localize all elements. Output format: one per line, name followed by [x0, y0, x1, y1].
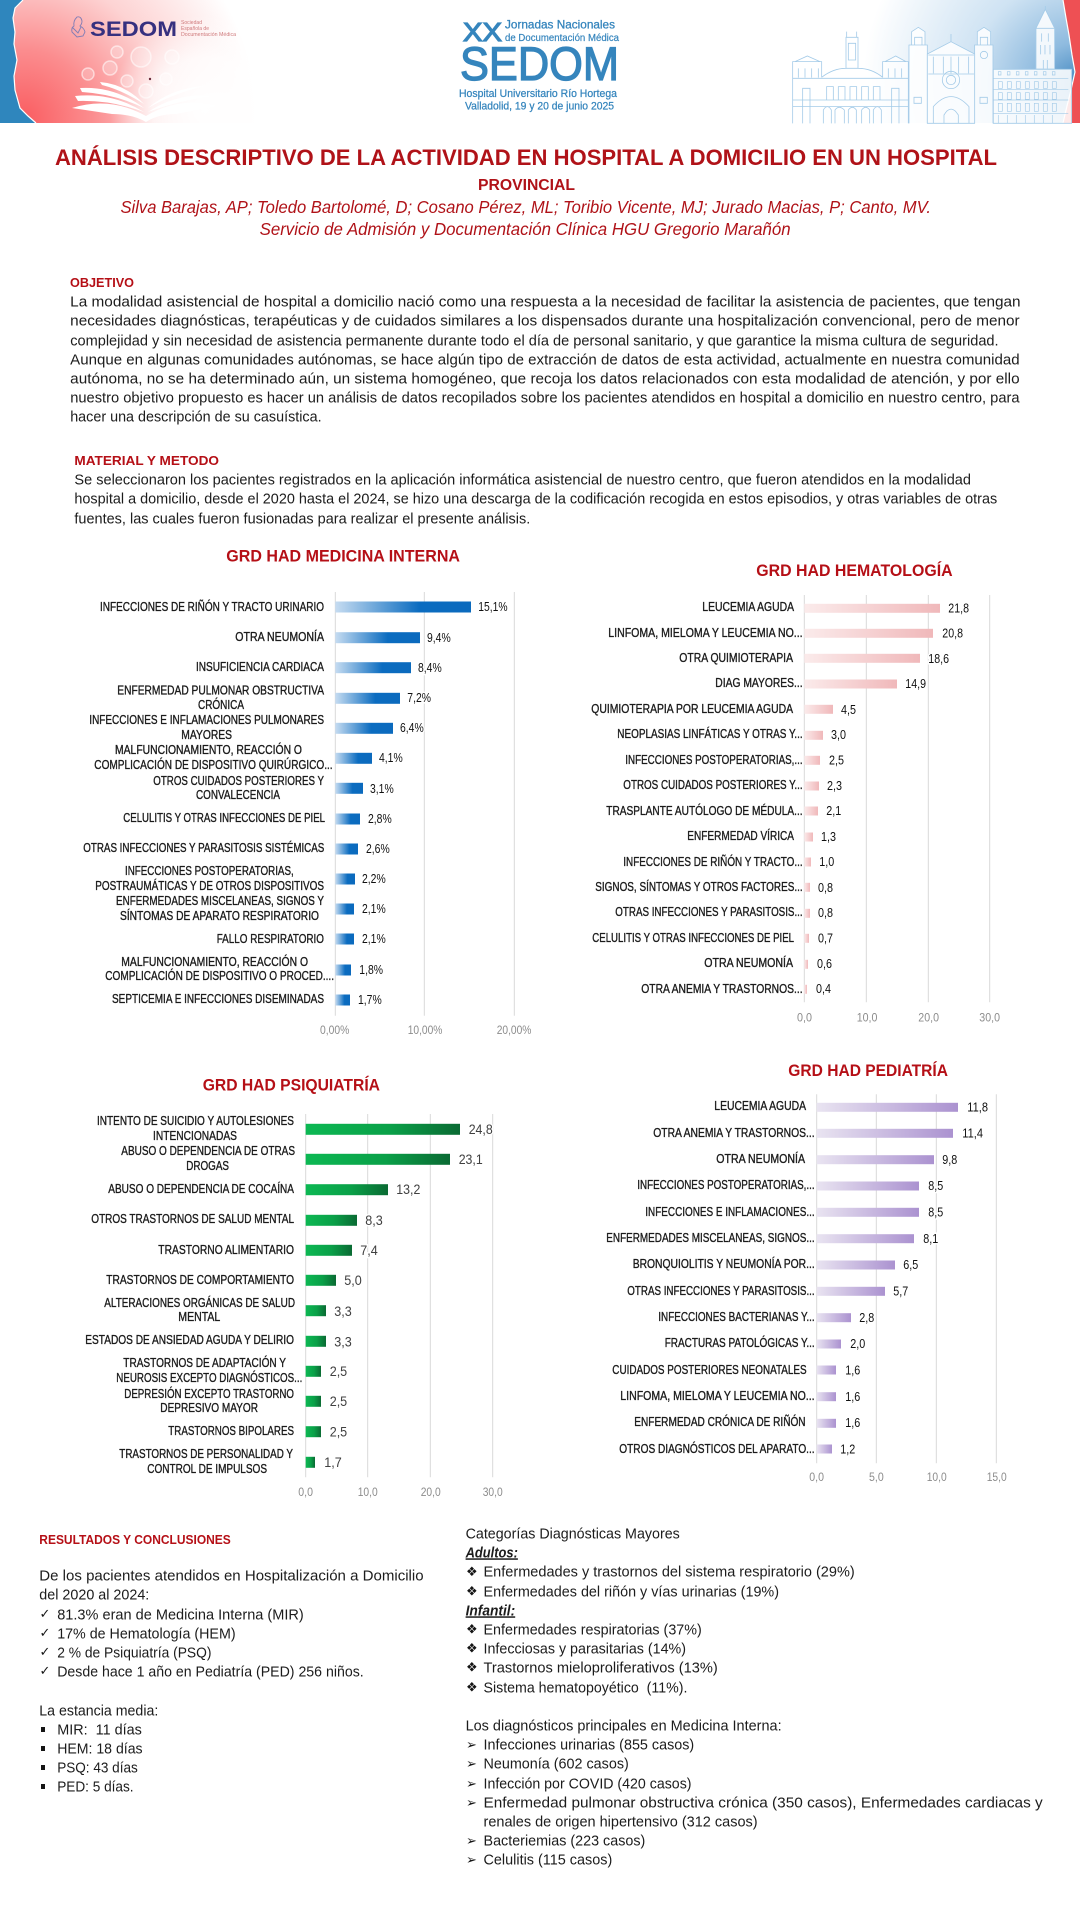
category labels: OTROS DIAGNÓSTICOS DEL APARATO...	[619, 1441, 815, 1456]
value labels: 23,1	[459, 1151, 483, 1167]
value labels: 4,1%	[379, 751, 403, 765]
intro text: De los pacientes atendidos en Hospitalización a Domicilio	[39, 1568, 424, 1585]
value labels	[840, 1100, 988, 1456]
category labels: OTRA NEUMONÍA	[704, 955, 794, 970]
value labels	[324, 1121, 493, 1470]
category labels: CUIDADOS POSTERIORES NEONATALES	[612, 1363, 807, 1377]
value labels: 8,5	[928, 1179, 943, 1193]
objective paragraph: La modalidad asistencial de hospital a domicilio nació como una respuesta a la necesidad de facilitar la asistencia de pacientes, que tengan	[70, 294, 1021, 311]
category labels: DEPRESIVO MAYOR	[160, 1401, 258, 1415]
icon: open book with floating bubbles	[72, 46, 218, 122]
SEDOM society logo: Documentación Médica	[181, 32, 236, 38]
diagnósticos principales list: ➢	[466, 1834, 477, 1849]
value labels	[816, 601, 969, 996]
section: objetivo	[70, 275, 1021, 426]
objective paragraph: necesidades diagnósticas, terapéuticas y de cuidados similares a los dispensados durante una hospitalización convencional, pero de menor	[70, 313, 1020, 330]
categorías diagnósticas mayores list: ❖	[466, 1584, 478, 1600]
intro text	[39, 1568, 424, 1604]
method paragraph: hospital a domicilio, desde el 2020 hasta el 2024, se hizo una descarga de la codificación recogida en estos episodios, y otras variables de otras	[74, 491, 997, 508]
congress logo: XX Jornadas Nacionales SEDOM: Hospital Universitario Río Hortega	[459, 88, 618, 100]
value labels: 1,6	[845, 1390, 860, 1404]
checklist of services	[40, 1606, 364, 1680]
value labels: 21,8	[948, 601, 969, 615]
value labels: 11,8	[967, 1100, 988, 1114]
category labels: OTRA ANEMIA Y TRASTORNOS...	[641, 982, 803, 996]
diagnósticos principales list: Infección por COVID (420 casos)	[484, 1775, 692, 1792]
checklist of services: Desde hace 1 año en Pediatría (PED) 256 niños.	[57, 1663, 364, 1680]
SEDOM society logo: SEDOM	[90, 18, 177, 41]
category labels: OTRAS INFECCIONES Y PARASITOSIS...	[627, 1284, 815, 1298]
method paragraph: Se seleccionaron los pacientes registrados en la aplicación informática asistencial de nuestro centro, que fueron atendidos en la modalidad	[74, 472, 971, 489]
bar chart rows	[306, 1124, 460, 1468]
categorías diagnósticas mayores list: Enfermedades respiratorias (37%)	[484, 1621, 702, 1638]
congress logo: XX Jornadas Nacionales SEDOM: de Documentación Médica	[505, 32, 619, 44]
category labels: SIGNOS, SÍNTOMAS Y OTROS FACTORES...	[595, 879, 803, 894]
axis labels: 20,0	[421, 1485, 441, 1499]
diagnósticos principales list: Celulitis (115 casos)	[484, 1851, 612, 1868]
category labels: LEUCEMIA AGUDA	[714, 1099, 807, 1113]
category labels: INFECCIONES POSTOPERATORIAS,...	[637, 1178, 815, 1192]
category labels: LINFOMA, MIELOMA Y LEUCEMIA NO...	[608, 626, 803, 640]
value labels: 0,4	[816, 982, 831, 996]
category labels	[606, 1099, 815, 1456]
congress logo: XX Jornadas Nacionales SEDOM	[459, 17, 619, 112]
category labels: ABUSO O DEPENDENCIA DE COCAÍNA	[108, 1181, 295, 1196]
category labels: ABUSO O DEPENDENCIA DE OTRAS	[121, 1144, 295, 1158]
value labels: 5,7	[893, 1284, 908, 1298]
category labels: ENFERMEDADES MISCELANEAS, SIGNOS Y	[116, 894, 325, 908]
value labels: 2,6%	[366, 842, 390, 856]
chart heading: GRD HAD MEDICINA INTERNA	[226, 548, 460, 566]
axis labels: 0,0	[298, 1485, 313, 1499]
category labels: OTRAS INFECCIONES Y PARASITOSIS...	[615, 905, 803, 919]
category labels: NEUROSIS EXCEPTO DIAGNÓSTICOS...	[116, 1370, 302, 1385]
bar chart rows	[804, 604, 940, 994]
axis labels: 0,0	[797, 1010, 812, 1024]
value labels: 2,2%	[362, 872, 386, 886]
category labels: TRASTORNO ALIMENTARIO	[158, 1243, 294, 1257]
value labels: 2,5	[330, 1424, 347, 1440]
category labels: ENFERMEDAD PULMONAR OBSTRUCTIVA	[117, 683, 325, 697]
category labels: INFECCIONES DE RIÑÓN Y TRACTO...	[623, 854, 803, 869]
diagnósticos principales list: ➢	[466, 1777, 477, 1792]
categorías diagnósticas mayores list: ❖	[466, 1680, 478, 1696]
category labels: INFECCIONES BACTERIANAS Y...	[658, 1310, 815, 1324]
categorías diagnósticas mayores list	[465, 1526, 855, 1696]
heading: material y metodo: MATERIAL Y METODO	[74, 453, 219, 468]
category labels: BRONQUIOLITIS Y NEUMONÍA POR...	[633, 1256, 815, 1271]
average stay list: PSQ: 43 días	[57, 1759, 138, 1776]
axis labels	[809, 1470, 1007, 1484]
SEDOM society logo: Sociedad	[181, 20, 202, 26]
average stay list: PED: 5 días.	[57, 1778, 134, 1795]
section: material y metodo	[74, 453, 997, 528]
title second line: PROVINCIAL	[478, 177, 575, 194]
category labels: SEPTICEMIA E INFECCIONES DISEMINADAS	[112, 992, 324, 1006]
average stay list	[39, 1703, 158, 1795]
value labels: 0,8	[818, 906, 833, 920]
objective paragraph: nuestro objetivo propuesto es hacer un análisis de datos recopilados sobre los pacientes atendidos en hospital a domicilio en nuestro centro, para	[70, 390, 1020, 407]
value labels: 6,5	[903, 1258, 918, 1272]
value labels: 1,8%	[359, 963, 383, 977]
axis labels: 30,0	[483, 1485, 503, 1499]
category labels: MENTAL	[178, 1310, 220, 1324]
checklist of services: 81.3% eran de Medicina Interna (MIR)	[57, 1606, 304, 1623]
panel: chart GRD HAD Hematología	[591, 561, 1000, 1024]
category labels: OTRA QUIMIOTERAPIA	[679, 651, 794, 665]
value labels: 6,4%	[400, 721, 424, 735]
axis labels: 20,00%	[497, 1023, 532, 1037]
axis labels: 10,00%	[408, 1023, 443, 1037]
category labels: OTRAS INFECCIONES Y PARASITOSIS SISTÉMICAS	[83, 840, 324, 855]
axis labels: 5,0	[869, 1470, 884, 1484]
category labels: INTENCIONADAS	[153, 1129, 237, 1143]
value labels: 0,6	[817, 957, 832, 971]
axis labels: 10,0	[857, 1010, 878, 1024]
axis labels	[797, 1010, 1000, 1024]
category labels: MALFUNCIONAMIENTO, REACCIÓN O	[115, 742, 302, 757]
checklist of services: ✓	[40, 1645, 50, 1660]
congress logo: XX Jornadas Nacionales SEDOM: Jornadas Nacionales	[505, 18, 615, 32]
logo icon: figure outline	[72, 17, 85, 37]
poster title block	[55, 145, 997, 239]
congress logo: XX Jornadas Nacionales SEDOM: Valladolid, 19 y 20 de junio 2025	[465, 100, 614, 112]
category labels: COMPLICACIÓN DE DISPOSITIVO QUIRÚRGICO...	[94, 757, 333, 772]
category labels: OTRA NEUMONÍA	[716, 1151, 806, 1166]
axis labels: 30,0	[979, 1010, 1000, 1024]
panel: categorías diagnósticas y diagnósticos principales	[465, 1526, 1043, 1868]
categorías diagnósticas mayores list: Infantil:	[466, 1602, 515, 1619]
category labels: NEOPLASIAS LINFÁTICAS Y OTRAS Y...	[617, 726, 803, 741]
category labels: LEUCEMIA AGUDA	[702, 600, 795, 614]
value labels: 2,1	[826, 804, 841, 818]
average stay list: La estancia media:	[39, 1703, 158, 1720]
value labels: 2,3	[827, 779, 842, 793]
value labels: 1,6	[845, 1363, 860, 1377]
category labels: OTROS CUIDADOS POSTERIORES Y...	[623, 778, 803, 792]
category labels: INFECCIONES E INFLAMACIONES...	[645, 1205, 815, 1219]
category labels: CELULITIS Y OTRAS INFECCIONES DE PIEL	[123, 811, 325, 825]
category labels: CELULITIS Y OTRAS INFECCIONES DE PIEL	[592, 931, 794, 945]
SEDOM society logo: Española de	[181, 26, 209, 32]
category labels: OTROS CUIDADOS POSTERIORES Y	[153, 774, 325, 788]
category labels: COMPLICACIÓN DE DISPOSITIVO O PROCED....	[105, 968, 334, 983]
intro text: del 2020 al 2024:	[39, 1587, 149, 1604]
value labels: 8,3	[365, 1212, 383, 1228]
value labels: 3,3	[334, 1303, 352, 1319]
category labels: CONVALECENCIA	[196, 788, 281, 802]
category labels: TRASTORNOS DE ADAPTACIÓN Y	[123, 1355, 287, 1370]
category labels: FALLO RESPIRATORIO	[217, 932, 324, 946]
value labels: 3,1%	[370, 782, 394, 796]
value labels: 18,6	[928, 652, 949, 666]
value labels: 0,7	[818, 932, 833, 946]
axis labels: 10,0	[358, 1485, 378, 1499]
bar chart rows	[335, 602, 471, 1006]
diagnósticos principales list: ➢	[466, 1853, 477, 1868]
diagnósticos principales list: Los diagnósticos principales en Medicina Interna:	[466, 1718, 782, 1735]
panel: chart GRD HAD Psiquiatría	[85, 1076, 503, 1499]
categorías diagnósticas mayores list: Sistema hematopoyético (11%).	[484, 1679, 687, 1696]
axis labels: 10,0	[927, 1470, 947, 1484]
category labels: OTRA ANEMIA Y TRASTORNOS...	[653, 1126, 815, 1140]
average stay list: MIR: 11 días	[57, 1721, 142, 1738]
value labels: 3,0	[831, 728, 846, 742]
chart heading: GRD HAD HEMATOLOGÍA	[756, 561, 953, 580]
category labels: TRASPLANTE AUTÓLOGO DE MÉDULA...	[606, 803, 803, 818]
category labels: TRASTORNOS DE COMPORTAMIENTO	[106, 1273, 294, 1287]
SEDOM society logo	[72, 17, 236, 41]
axis labels: 15,0	[987, 1470, 1007, 1484]
categorías diagnósticas mayores list: Enfermedades y trastornos del sistema respiratorio (29%)	[484, 1564, 855, 1581]
value labels: 2,5	[330, 1393, 347, 1409]
category labels: INTENTO DE SUICIDIO Y AUTOLESIONES	[97, 1114, 294, 1128]
category labels: TRASTORNOS BIPOLARES	[168, 1424, 294, 1438]
category labels: ALTERACIONES ORGÁNICAS DE SALUD	[104, 1295, 295, 1310]
diagnósticos principales list: ➢	[466, 1738, 477, 1753]
value labels: 2,5	[829, 753, 844, 767]
heading: resultados y conclusiones: RESULTADOS Y CONCLUSIONES	[39, 1533, 231, 1547]
categorías diagnósticas mayores list: Categorías Diagnósticas Mayores	[466, 1526, 680, 1543]
categorías diagnósticas mayores list: Trastornos mieloproliferativos (13%)	[484, 1659, 718, 1676]
category labels: OTRA NEUMONÍA	[235, 629, 325, 644]
value labels: 0,8	[818, 881, 833, 895]
value labels: 1,3	[821, 830, 836, 844]
header banner	[0, 0, 1080, 123]
value labels: 2,1%	[362, 902, 386, 916]
categorías diagnósticas mayores list: Enfermedades del riñón y vías urinarias (19%)	[484, 1583, 779, 1600]
affiliation: Servicio de Admisión y Documentación Clínica HGU Gregorio Marañón	[260, 219, 791, 239]
value labels: 1,6	[845, 1416, 860, 1430]
category labels: QUIMIOTERAPIA POR LEUCEMIA AGUDA	[591, 702, 794, 716]
value labels: 13,2	[396, 1181, 420, 1197]
average stay list: HEM: 18 días	[57, 1740, 143, 1757]
checklist of services: ✓	[40, 1664, 50, 1679]
left banner art: red gradient and torn blue strip	[0, 0, 300, 123]
panel: resultados y conclusiones	[39, 1533, 424, 1795]
category labels: SÍNTOMAS DE APARATO RESPIRATORIO	[120, 908, 319, 923]
objective paragraph: autónoma, no se ha determinado aún, un sistema homogéneo, que recoja los datos relacionados con esta modalidad de atención, y por ello	[70, 371, 1020, 388]
category labels	[85, 1114, 302, 1476]
categorías diagnósticas mayores list: ❖	[466, 1642, 478, 1656]
value labels: 2,0	[850, 1337, 865, 1351]
category labels: ESTADOS DE ANSIEDAD AGUDA Y DELIRIO	[85, 1333, 294, 1347]
categorías diagnósticas mayores list: Adultos:	[465, 1544, 518, 1561]
congress logo: XX Jornadas Nacionales SEDOM: SEDOM	[460, 37, 619, 90]
method paragraph: fuentes, las cuales fueron fusionadas para realizar el presente análisis.	[74, 511, 530, 528]
authors: Silva Barajas, AP; Toledo Bartolomé, D; Cosano Pérez, ML; Toribio Vicente, MJ; Jurado Macias, P; Canto, MV.	[120, 197, 931, 217]
category labels: CONTROL DE IMPULSOS	[147, 1462, 267, 1476]
value labels: 20,8	[942, 626, 963, 640]
value labels: 24,8	[469, 1121, 493, 1137]
right banner art: blue gradient and torn red strip	[860, 0, 1080, 123]
category labels: INFECCIONES E INFLAMACIONES PULMONARES	[89, 713, 324, 727]
diagnósticos principales list: ➢	[466, 1757, 477, 1772]
panel: chart GRD HAD Pediatría	[606, 1061, 1007, 1484]
value labels	[358, 600, 508, 1007]
axis labels	[298, 1485, 503, 1499]
value labels: 8,1	[923, 1232, 938, 1246]
category labels: ENFERMEDAD VÍRICA	[687, 828, 795, 843]
diagnósticos principales list: ➢	[466, 1796, 477, 1811]
category labels: OTROS TRASTORNOS DE SALUD MENTAL	[91, 1212, 294, 1226]
category labels	[83, 599, 334, 1006]
value labels: 8,5	[928, 1205, 943, 1219]
value labels: 3,3	[334, 1333, 352, 1349]
value labels: 2,8%	[368, 812, 392, 826]
chart heading: GRD HAD PEDIATRÍA	[788, 1061, 948, 1080]
diagnósticos principales list	[466, 1718, 1043, 1868]
value labels: 4,5	[841, 703, 856, 717]
categorías diagnósticas mayores list: ❖	[466, 1622, 478, 1638]
value labels: 7,4	[360, 1242, 378, 1258]
value labels: 2,5	[330, 1363, 347, 1379]
value labels: 1,7%	[358, 993, 382, 1007]
category labels: DEPRESIÓN EXCEPTO TRASTORNO	[124, 1386, 294, 1401]
method paragraph	[74, 472, 997, 528]
value labels: 9,8	[942, 1153, 957, 1167]
category labels: INSUFICIENCIA CARDIACA	[196, 660, 325, 674]
objective paragraph	[70, 294, 1021, 426]
value labels: 9,4%	[427, 631, 451, 645]
objective paragraph: Aunque en algunas comunidades autónomas, se hace algún tipo de extracción de datos de esta actividad, actualmente en nuestra comunidad	[70, 351, 1020, 368]
axis labels	[320, 1023, 532, 1037]
value labels: 5,0	[344, 1272, 362, 1288]
category labels: FRACTURAS PATOLÓGICAS Y...	[665, 1335, 815, 1350]
category labels: MAYORES	[181, 728, 232, 742]
category labels: INFECCIONES POSTOPERATORIAS,...	[625, 753, 803, 767]
value labels: 1,7	[324, 1454, 342, 1470]
value labels: 2,8	[859, 1311, 874, 1325]
value labels: 8,4%	[418, 661, 442, 675]
category labels: CRÓNICA	[198, 697, 245, 712]
category labels: ENFERMEDADES MISCELANEAS, SIGNOS...	[606, 1231, 815, 1245]
objective paragraph: complejidad y sin necesidad de asistencia permanente durante todo el día de personal sanitario, y que garantice la misma cultura de seguridad.	[70, 333, 999, 350]
diagnósticos principales list: Bacteriemias (223 casos)	[484, 1832, 645, 1849]
objective paragraph: hacer una descripción de su casuística.	[70, 409, 322, 426]
main title: ANÁLISIS DESCRIPTIVO DE LA ACTIVIDAD EN HOSPITAL A DOMICILIO EN UN HOSPITAL	[55, 145, 997, 170]
checklist of services: ✓	[40, 1607, 50, 1622]
axis labels: 0,0	[809, 1470, 824, 1484]
illustration: Valladolid buildings line drawing	[793, 6, 1072, 123]
category labels: DIAG MAYORES...	[715, 676, 803, 690]
value labels: 7,2%	[407, 691, 431, 705]
value labels: 2,1%	[362, 932, 386, 946]
diagnósticos principales list: Enfermedad pulmonar obstructiva crónica (350 casos), Enfermedades cardiacas y	[484, 1794, 1043, 1811]
diagnósticos principales list: renales de origen hipertensivo (312 casos)	[484, 1813, 758, 1830]
categorías diagnósticas mayores list: Infecciosas y parasitarias (14%)	[484, 1640, 686, 1657]
value labels: 11,4	[962, 1126, 983, 1140]
panel: chart GRD HAD Medicina Interna	[83, 548, 532, 1037]
category labels: INFECCIONES DE RIÑÓN Y TRACTO URINARIO	[100, 599, 324, 614]
category labels	[591, 600, 803, 996]
checklist of services: ✓	[40, 1626, 50, 1641]
categorías diagnósticas mayores list: ❖	[466, 1660, 478, 1676]
bar chart rows	[817, 1103, 958, 1454]
axis labels: 20,0	[918, 1010, 939, 1024]
diagnósticos principales list: Infecciones urinarias (855 casos)	[484, 1736, 694, 1753]
congress logo: XX Jornadas Nacionales SEDOM: XX	[463, 17, 502, 47]
category labels: MALFUNCIONAMIENTO, REACCIÓN O	[121, 954, 308, 969]
category labels: DROGAS	[186, 1159, 229, 1173]
category labels: INFECCIONES POSTOPERATORIAS,	[125, 864, 294, 878]
categorías diagnósticas mayores list: ❖	[466, 1565, 478, 1580]
axis labels: 0,00%	[320, 1023, 350, 1037]
category labels: LINFOMA, MIELOMA Y LEUCEMIA NO...	[620, 1389, 815, 1403]
chart heading: GRD HAD PSIQUIATRÍA	[203, 1076, 380, 1095]
checklist of services: 17% de Hematología (HEM)	[57, 1625, 236, 1642]
category labels: ENFERMEDAD CRÓNICA DE RIÑÓN	[634, 1414, 806, 1429]
heading: objetivo: OBJETIVO	[70, 275, 134, 290]
value labels: 1,0	[819, 855, 834, 869]
value labels: 14,9	[905, 677, 926, 691]
category labels: TRASTORNOS DE PERSONALIDAD Y	[119, 1447, 294, 1461]
checklist of services: 2 % de Psiquiatría (PSQ)	[57, 1644, 212, 1661]
category labels: POSTRAUMÁTICAS Y DE OTROS DISPOSITIVOS	[95, 878, 324, 893]
value labels: 1,2	[840, 1442, 855, 1456]
value labels: 15,1%	[478, 600, 508, 614]
diagnósticos principales list: Neumonía (602 casos)	[484, 1755, 629, 1772]
